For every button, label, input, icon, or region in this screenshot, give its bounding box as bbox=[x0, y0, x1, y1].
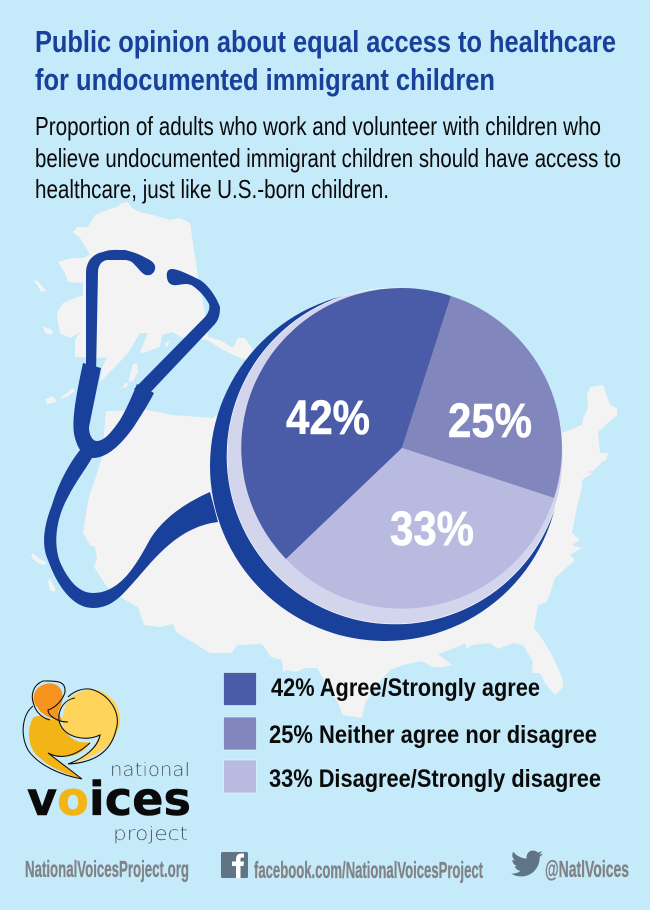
label 42%: 42% bbox=[286, 392, 370, 445]
legend swatch: agree bbox=[224, 672, 256, 706]
slice: 33% disagree bbox=[286, 448, 554, 609]
slice: 42% agree bbox=[241, 288, 451, 559]
logo: outlines bbox=[23, 681, 117, 779]
logo word: project: project bbox=[113, 823, 188, 845]
binaural yoke bbox=[73, 363, 154, 458]
logo word: national: national bbox=[110, 759, 190, 781]
chest piece inner disc bbox=[227, 288, 563, 624]
facebook text: facebook.com/NationalVoicesProject bbox=[254, 857, 483, 883]
map: Alaska bbox=[31, 202, 262, 592]
right ear tube and tip bbox=[134, 269, 220, 397]
icon: facebook bbox=[221, 852, 248, 878]
logo: dark speech bubble bbox=[29, 716, 90, 779]
label 25%: 25% bbox=[448, 395, 532, 448]
legend swatch: neither bbox=[224, 717, 256, 750]
legend text: agree: 42% Agree/Strongly agree bbox=[271, 674, 540, 702]
slice: 25% neither bbox=[402, 296, 562, 498]
chest tube bbox=[44, 450, 218, 608]
icon: twitter bird bbox=[511, 850, 543, 876]
logo: National Voices Project bbox=[23, 681, 191, 845]
stethoscope bbox=[44, 250, 560, 641]
legend bbox=[224, 672, 601, 793]
website: NationalVoicesProject.org bbox=[25, 856, 189, 882]
subtitle bbox=[35, 111, 621, 204]
logo word: voices: voices bbox=[27, 772, 191, 826]
pie chart bbox=[241, 288, 562, 609]
chest piece outer ring bbox=[210, 291, 560, 641]
subtitle: healthcare, just like U.S.-born children. bbox=[35, 174, 389, 204]
map: continental United States bbox=[83, 350, 617, 718]
legend text: neither: 25% Neither agree nor disagree bbox=[269, 721, 597, 749]
footer links bbox=[25, 850, 629, 883]
logo: light speech bubble bbox=[62, 690, 120, 763]
legend swatch: disagree bbox=[224, 760, 256, 793]
legend text: disagree: 33% Disagree/Strongly disagree bbox=[269, 765, 601, 793]
logo: orange head bbox=[34, 683, 63, 720]
title bbox=[35, 24, 616, 97]
label 33%: 33% bbox=[390, 503, 474, 556]
title: for undocumented immigrant children bbox=[35, 62, 495, 97]
left ear tube and tip bbox=[86, 250, 155, 374]
